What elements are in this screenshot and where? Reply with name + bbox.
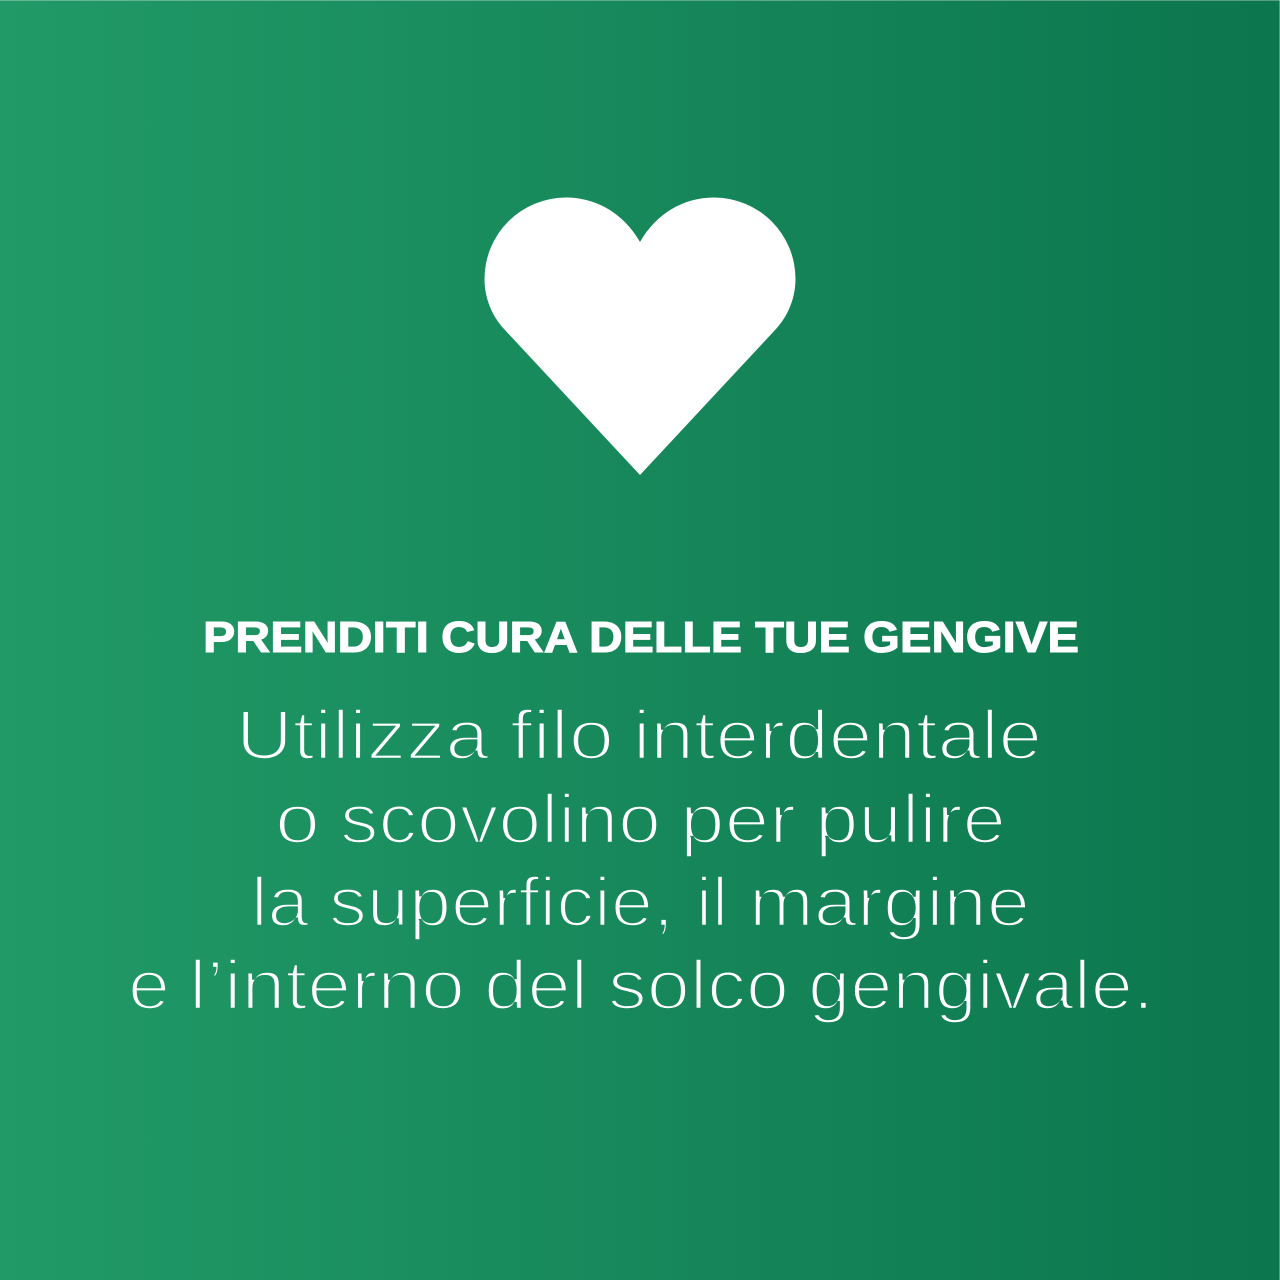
- body text block: margine: [749, 863, 1030, 941]
- body text block: l’interno: [189, 946, 465, 1024]
- body text block: scovolino: [340, 780, 661, 858]
- body text block: superficie,: [329, 863, 674, 941]
- heading: PRENDITI: [203, 613, 429, 662]
- body text block: per: [680, 780, 796, 858]
- body text block: gengivale.: [808, 946, 1154, 1024]
- body text block: o: [275, 780, 320, 858]
- body text block: interdentale: [633, 696, 1042, 774]
- heading: [203, 613, 1079, 662]
- heading: CURA: [441, 613, 578, 662]
- body text block: filo: [510, 696, 614, 774]
- body text block: del: [484, 946, 588, 1024]
- heading: GENGIVE: [863, 613, 1079, 662]
- body text block: Utilizza: [236, 696, 489, 774]
- body text block: e: [128, 946, 170, 1024]
- heading: TUE: [755, 613, 850, 662]
- body text block: la: [251, 863, 309, 941]
- body text block: solco: [608, 946, 789, 1024]
- body text block: pulire: [815, 780, 1006, 858]
- body text block: [128, 696, 1154, 1024]
- body text block: il: [696, 863, 728, 941]
- heading: DELLE: [589, 613, 742, 662]
- icon: white heart: [484, 198, 796, 475]
